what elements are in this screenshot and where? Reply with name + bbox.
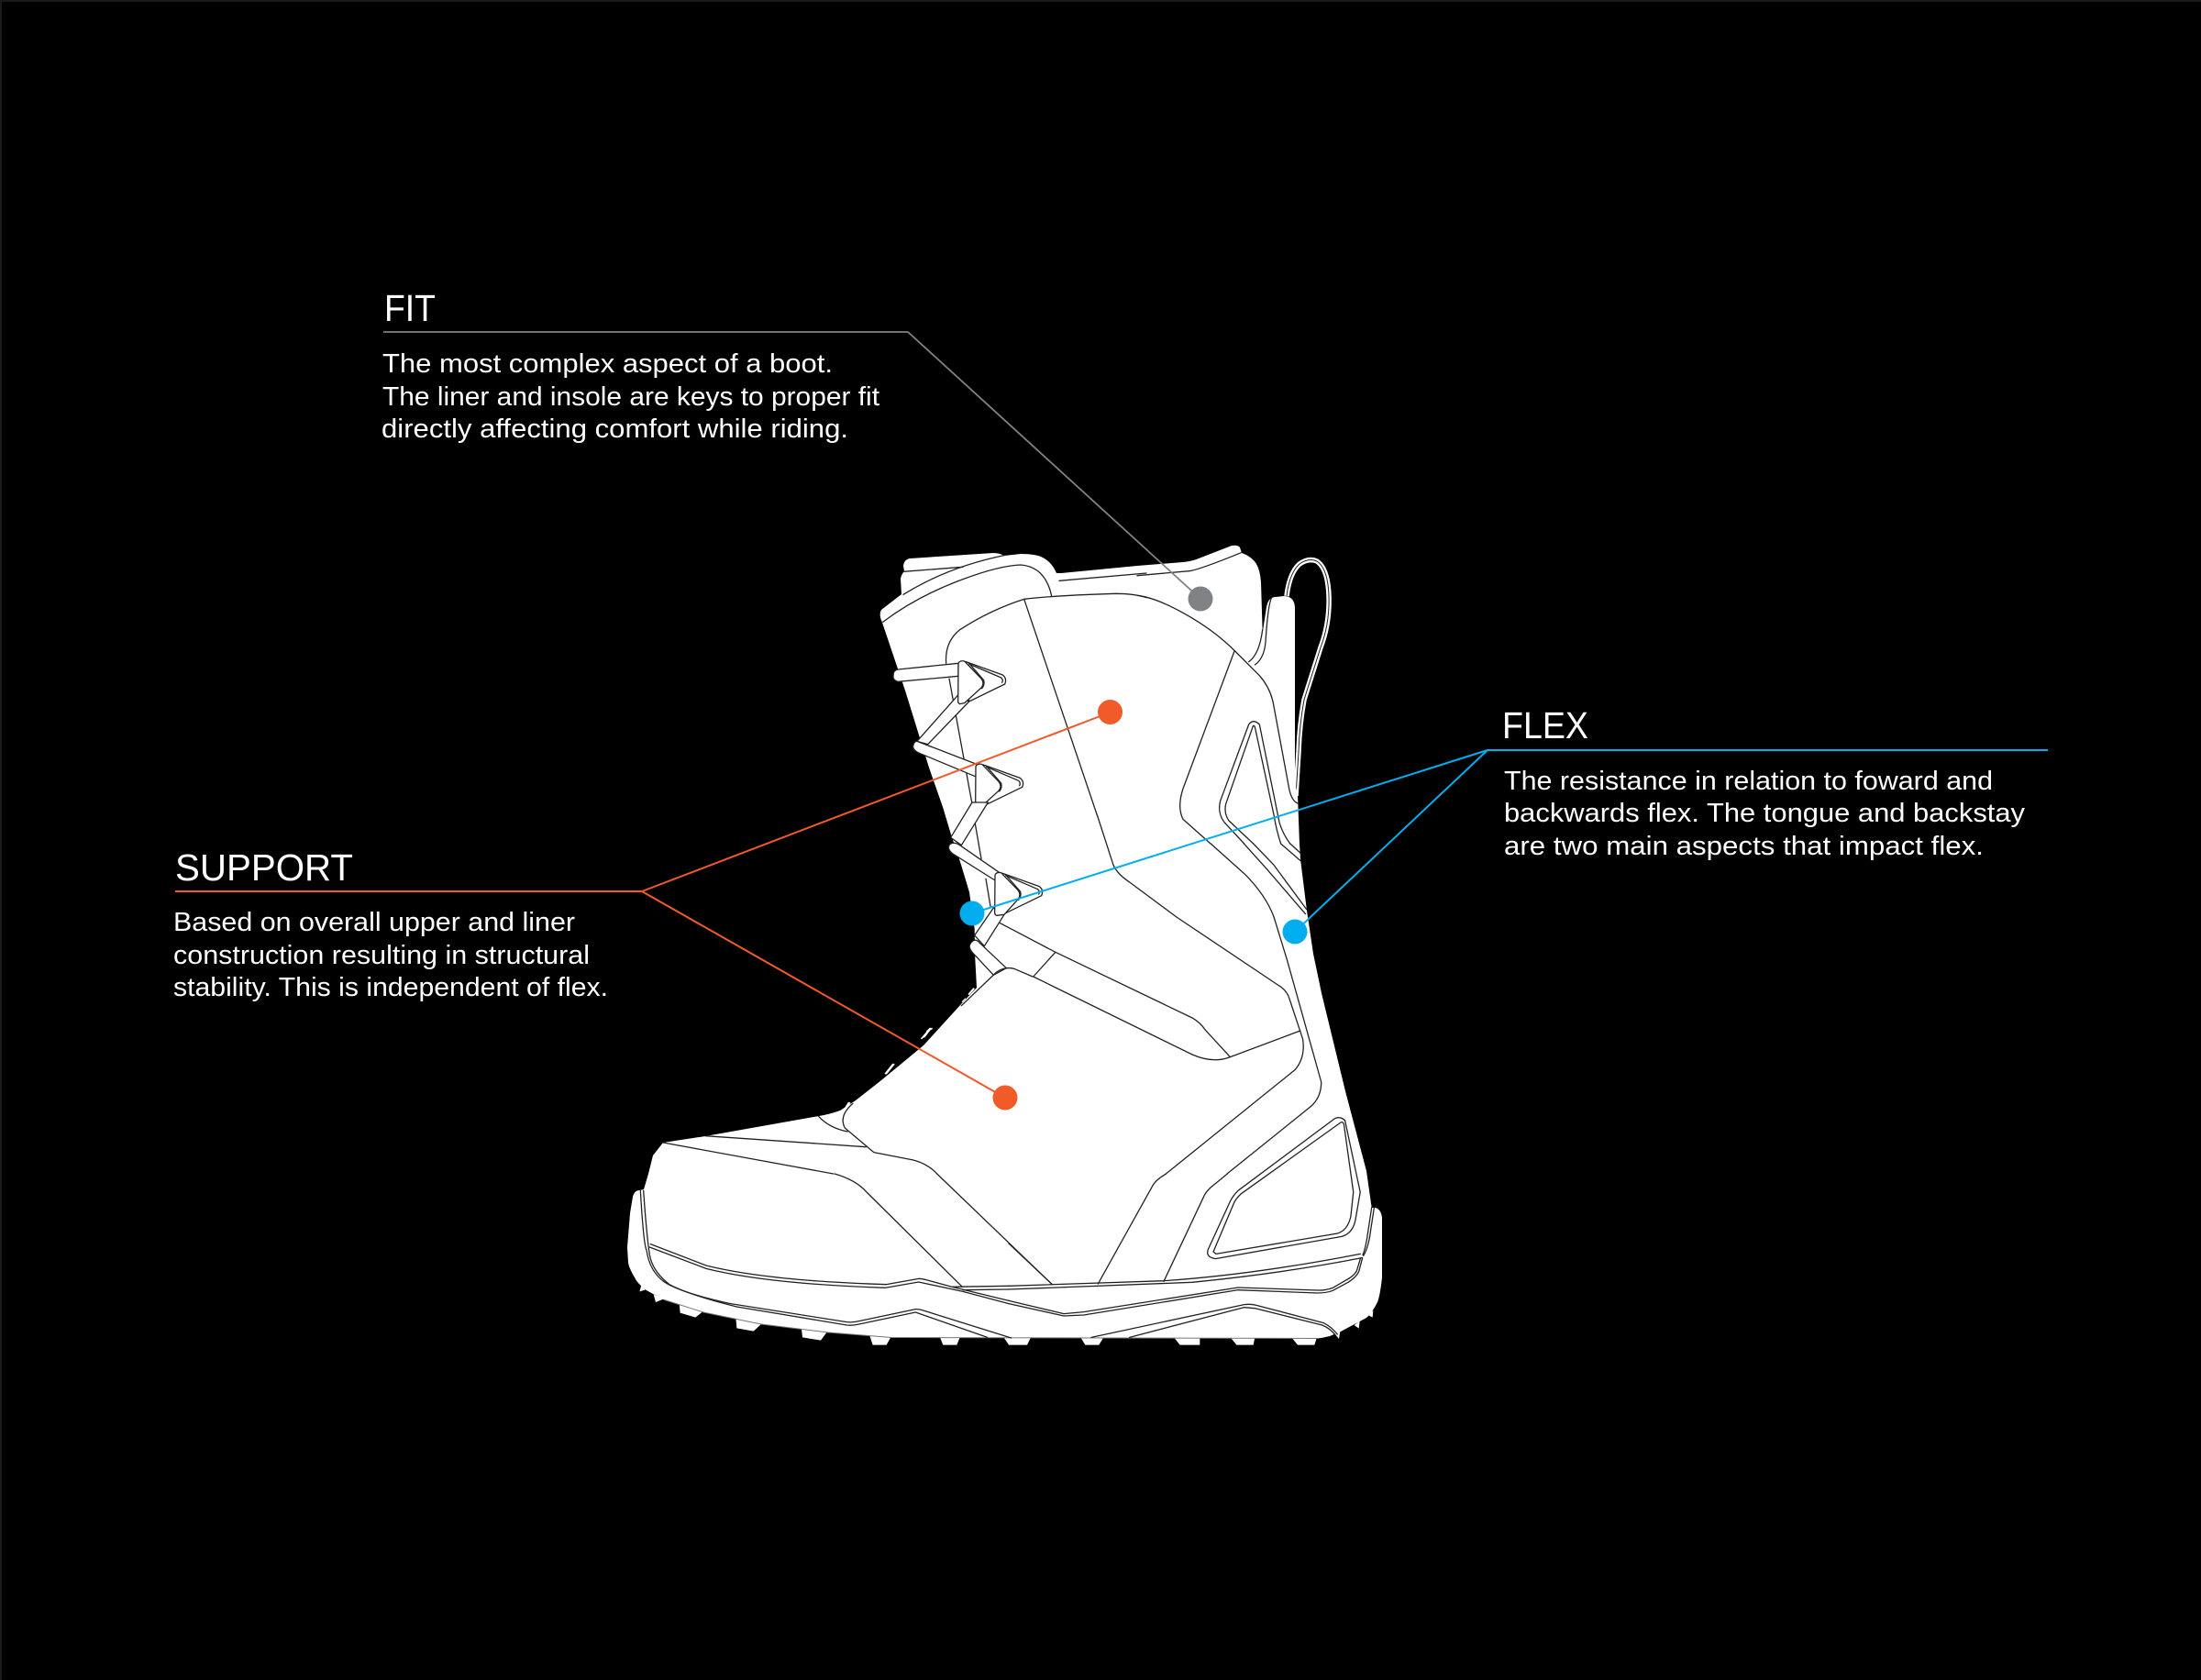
- instep panel corner: [961, 968, 1033, 1006]
- lower lace bars and liner line: [948, 802, 1006, 975]
- tongue and heel lines: [1137, 553, 1298, 844]
- flex text: are two main aspects that impact flex.: [1504, 832, 1984, 861]
- icon: boot pull loop: [1287, 560, 1329, 796]
- ankle and toe panel lines: [663, 917, 1322, 1174]
- callout: flex: [959, 704, 2048, 945]
- eyelet bumps: [922, 989, 974, 1038]
- flex dot left: [959, 901, 985, 926]
- boot silhouette: [627, 546, 1382, 1339]
- fit text: [382, 349, 879, 444]
- callout: fit: [382, 287, 1212, 611]
- side vent triangle: [1220, 722, 1290, 844]
- mid boot lines: [1098, 816, 1307, 917]
- eyelet bumps lower: [845, 1029, 930, 1110]
- flex dot right: [1282, 919, 1308, 945]
- heel window: [1208, 1118, 1360, 1259]
- sole bottom edge: [663, 1299, 1318, 1339]
- support dot upper: [1098, 700, 1123, 724]
- lace hook 3: [995, 872, 1043, 915]
- fit text: The liner and insole are keys to proper fit: [382, 382, 879, 412]
- fit text: directly affecting comfort while riding.: [382, 414, 848, 444]
- rear mudguard and sole lines: [1009, 1208, 1374, 1337]
- flex leader lines: [972, 750, 2048, 932]
- forefoot lines: [835, 1174, 1052, 1287]
- support text: [173, 908, 608, 1002]
- sole lugs: [639, 1286, 1373, 1345]
- lace hook 2: [976, 764, 1023, 807]
- support text: construction resulting in structural: [173, 941, 590, 970]
- top lace bar and diagonal: [917, 695, 969, 745]
- flex text: [1504, 767, 2026, 861]
- support leader lines: [175, 713, 1110, 1098]
- fit heading: FIT: [384, 287, 436, 329]
- second lace bar: [913, 741, 977, 777]
- support text: Based on overall upper and liner: [173, 908, 576, 937]
- fit leader line: [383, 332, 1200, 599]
- support heading: SUPPORT: [175, 846, 353, 889]
- rear boot lines: [1009, 1174, 1227, 1285]
- fit text: The most complex aspect of a boot.: [382, 349, 833, 379]
- flex text: backwards flex. The tongue and backstay: [1504, 799, 2026, 828]
- callout: support: [173, 700, 1123, 1110]
- collar and liner lines: [883, 556, 1146, 816]
- flex text: The resistance in relation to foward and: [1504, 767, 1993, 796]
- support text: stability. This is independent of flex.: [173, 973, 608, 1002]
- flex heading: FLEX: [1502, 704, 1588, 746]
- illustration: snowboard boot: [627, 546, 1382, 1345]
- forefoot mudguard and sole lines: [640, 1190, 1012, 1338]
- fit dot: [1189, 587, 1212, 611]
- support dot lower: [992, 1086, 1018, 1110]
- lace hook 1: [958, 661, 1006, 704]
